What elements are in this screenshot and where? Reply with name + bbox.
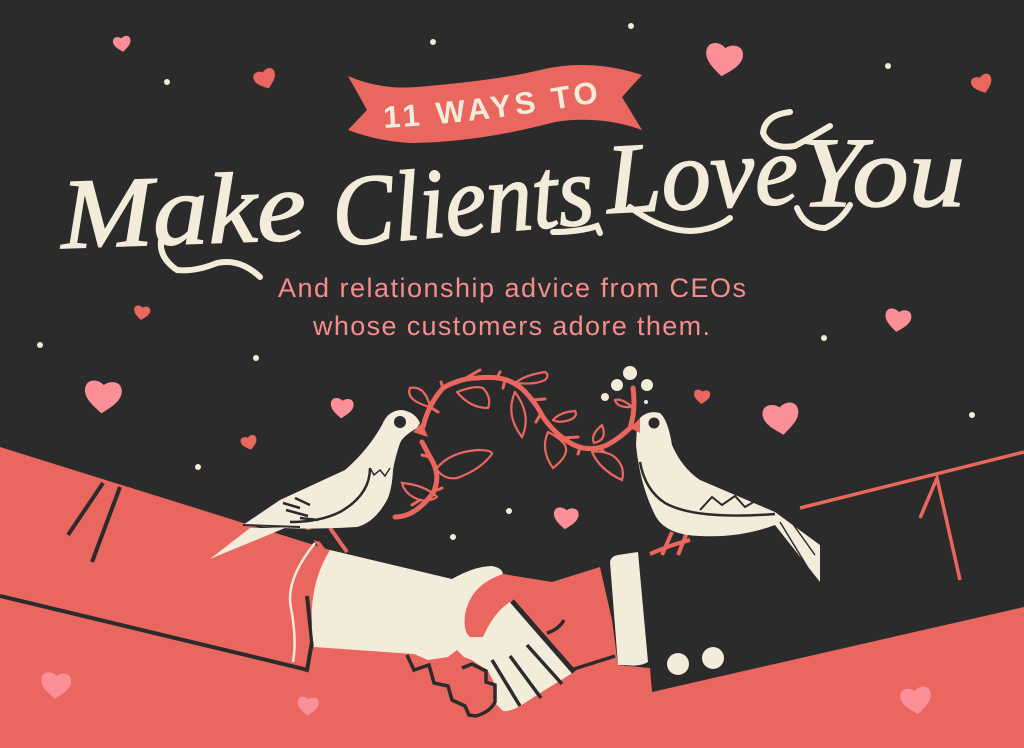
right jacket seam lines (800, 452, 1024, 580)
olive berries (601, 366, 653, 404)
left dove (210, 410, 428, 559)
subtitle (278, 273, 746, 341)
subtitle: whose customers adore them. (312, 311, 710, 341)
ribbon banner: 11 WAYS TO (384, 82, 596, 128)
right dove (630, 412, 820, 582)
red ground and left sleeve (0, 447, 1024, 748)
subtitle: And relationship advice from CEOs (278, 273, 746, 303)
cuff buttons (667, 647, 724, 675)
title: Make (57, 151, 308, 270)
title: Clients (327, 135, 598, 268)
olive vine with leaves (395, 370, 634, 517)
night sky dots (37, 23, 975, 540)
sleeve highlight (290, 543, 315, 662)
handshake (312, 550, 615, 716)
ribbon banner (348, 65, 642, 143)
title: You (800, 117, 965, 228)
title: Love (601, 114, 801, 235)
right shirt cuff (610, 552, 648, 666)
left sleeve details (0, 483, 312, 670)
title (57, 112, 965, 277)
